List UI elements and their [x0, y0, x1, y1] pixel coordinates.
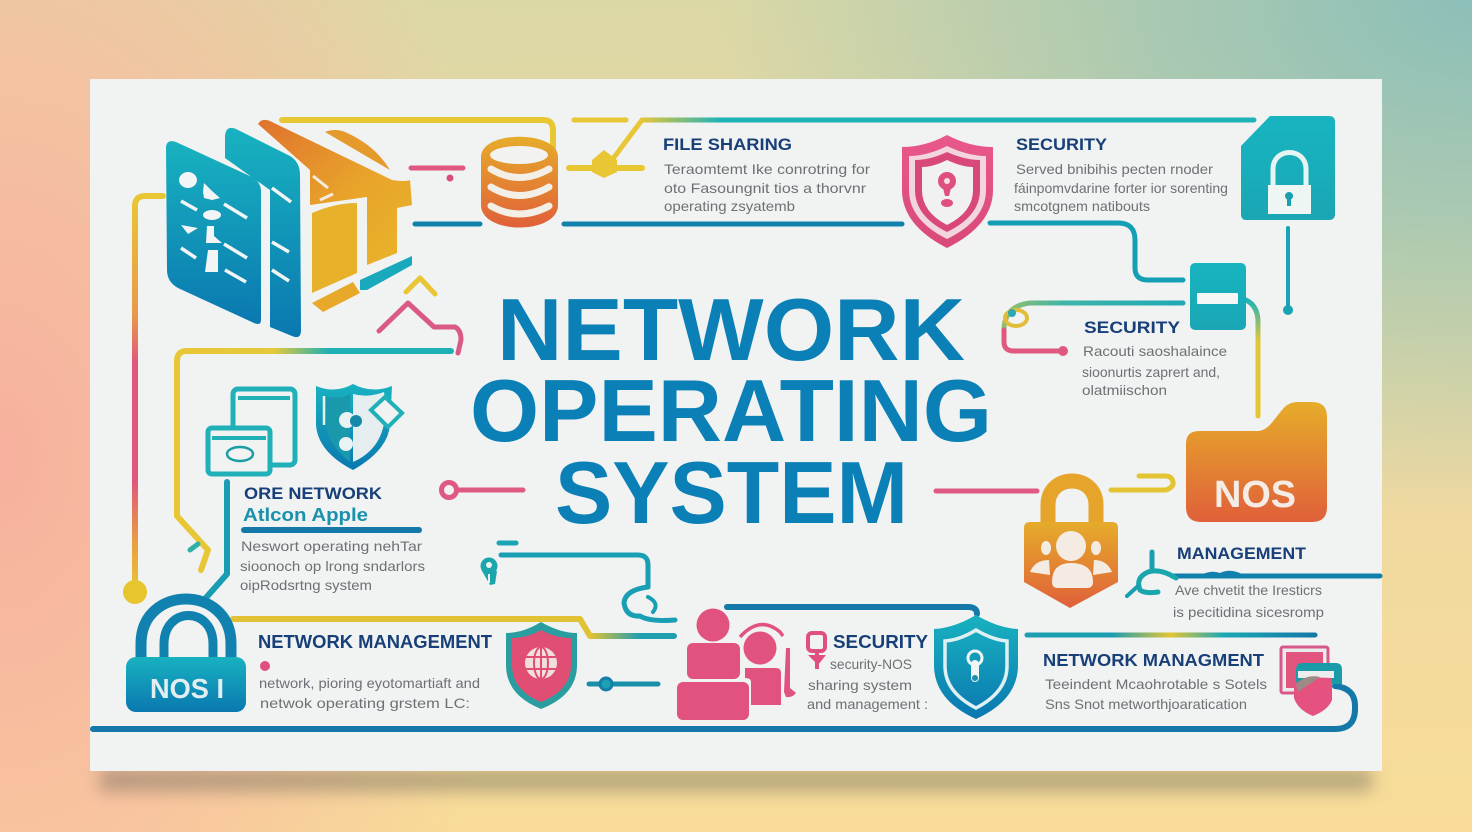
panel: network management left: NETWORK MANAGEMENT: [258, 632, 492, 652]
icon: orange lock with people: [1024, 481, 1118, 608]
panel: security middle: [1082, 318, 1227, 398]
panel: security middle: sioonurtis zaprert and,: [1082, 364, 1220, 380]
icon: folder and shield: [1281, 647, 1342, 716]
panel: security middle: olatmiischon: [1082, 382, 1167, 398]
panel: management: Ave chvetit the Iresticrs: [1175, 582, 1322, 598]
icon: small pink key: [808, 633, 826, 669]
panel: core network: oipRodsrtng system: [240, 577, 372, 593]
icon: server and files: [166, 120, 412, 337]
panel: management: is pecitidina sicesromp: [1173, 604, 1324, 620]
panel: network management left: netwok operating grstem LC:: [260, 695, 470, 711]
panel: network management left: [258, 632, 492, 711]
panel: file sharing: [663, 135, 870, 214]
icon: teal lock document: [1241, 116, 1335, 220]
panel: security bottom: SECURITY: [833, 632, 928, 652]
panel: network management right: [1043, 650, 1267, 712]
icon: pink people: [677, 608, 796, 720]
panel: security middle: Racouti saoshalaince: [1083, 343, 1227, 359]
icon: NOS padlock: [126, 599, 246, 712]
icon: red globe shield: [506, 622, 577, 709]
panel: security top: fáinpomvdarine forter ior sorenting: [1014, 180, 1228, 196]
panel: network management right: NETWORK MANAGMENT: [1043, 650, 1264, 670]
panel: security top: smcotgnem natibouts: [1014, 198, 1150, 214]
panel: file sharing: oto Fasoungnit tios a thorvnr: [664, 180, 866, 196]
title: SYSTEM: [555, 443, 908, 542]
panel: core network: Neswort operating nehTar: [241, 538, 422, 554]
icon: NOS folder: NOS: [1214, 474, 1296, 516]
panel: network management right: Teeindent Mcaohrotable s Sotels: [1045, 676, 1267, 692]
panel: security top: SECURITY: [1016, 135, 1108, 154]
panel: file sharing: operating zsyatemb: [664, 198, 795, 214]
icon: window frames: [208, 389, 295, 474]
panel: security bottom: and management :: [807, 696, 928, 712]
panel: file sharing: FILE SHARING: [663, 135, 792, 154]
panel: security bottom: security-NOS: [830, 656, 912, 672]
icon: NOS padlock: NOS I: [150, 673, 224, 704]
panel: file sharing: Teraomtemt Ike conrotring for: [664, 161, 870, 177]
panel: management: [1173, 544, 1324, 620]
panel: security bottom: sharing system: [808, 677, 912, 693]
icon: key: [480, 558, 498, 585]
white card panel: [90, 79, 1382, 771]
panel: network management right: Sns Snot metworthjoaratication: [1045, 696, 1247, 712]
title: NETWORK: [497, 280, 965, 379]
panel: core network: ORE NETWORK: [244, 484, 383, 503]
panel: core network: [240, 484, 425, 593]
panel: security middle: SECURITY: [1084, 318, 1181, 337]
icon: NOS folder: [1186, 402, 1327, 522]
icon: teal network shield: [316, 384, 402, 470]
panel: network management left: network, pioring eyotomartiaft and: [259, 675, 480, 691]
panel: core network: Atlcon Apple: [243, 505, 368, 525]
panel: security bottom: [807, 632, 928, 712]
icon: teal device: [1190, 263, 1246, 330]
panel: management: MANAGEMENT: [1177, 544, 1307, 563]
icon: database: [481, 137, 558, 228]
icon: teal shield with key: [934, 615, 1018, 719]
title: OPERATING: [470, 361, 992, 460]
icon: management tool: [1127, 552, 1176, 596]
panel: security top: Served bnibihis pecten rnoder: [1016, 161, 1213, 177]
icon: pink shield: [902, 135, 993, 248]
connector lines: [93, 120, 1380, 729]
panel: core network: sioonoch op lrong sndarlors: [240, 558, 425, 574]
panel: security top: [1014, 135, 1228, 214]
title: [470, 280, 992, 542]
card shadow: [100, 768, 1372, 792]
